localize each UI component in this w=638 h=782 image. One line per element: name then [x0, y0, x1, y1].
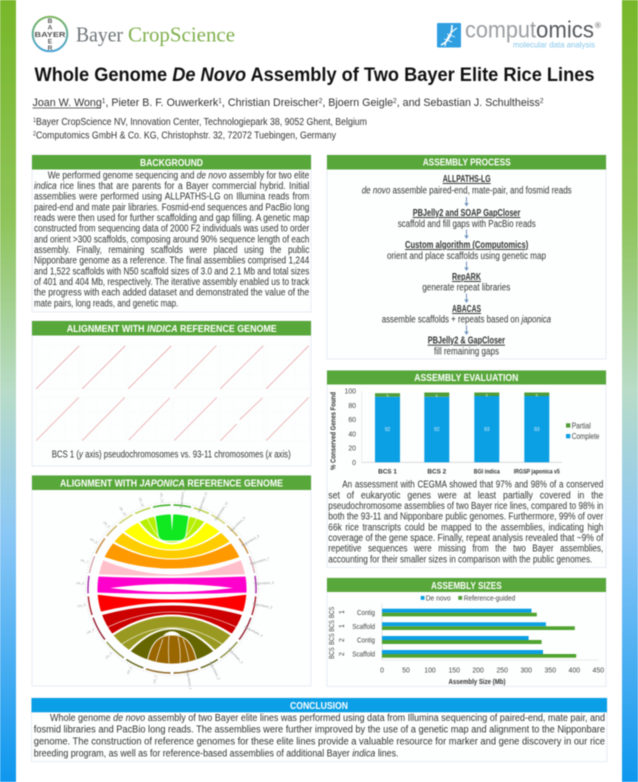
text: background body: mate pairs, long reads, and genetic map.	[34, 298, 178, 309]
text: evaluation body: 66k rice transcripts could be mapped to the assemblies, indicating high	[328, 522, 603, 533]
caption: dot plots: BCS 1 (y axis) pseudochromosomes vs. 93-11 chromosomes (x axis)	[52, 449, 291, 460]
text: evaluation body: accounting for their smaller sizes in comparison with the public genomes.	[328, 554, 592, 565]
x axis labels: 150	[448, 668, 460, 674]
chromosome labels: Nipponbare_12	[179, 486, 186, 509]
step: custom algorithm	[387, 240, 546, 262]
logo: Bayer CropScience: A	[48, 24, 53, 32]
heading: japonica alignment	[32, 476, 311, 490]
bar: BCS 2: BCS 2	[427, 468, 447, 476]
chromosome labels	[76, 486, 274, 690]
legend: De novo	[426, 596, 451, 602]
chromosome labels: chr_6	[76, 581, 84, 585]
logo: Computomics: comput	[465, 16, 536, 42]
x axis labels	[380, 668, 604, 674]
heading: assembly sizes: ASSEMBLY SIZES	[431, 581, 502, 592]
panel: background	[32, 155, 311, 312]
step: PBJelly2 and SOAP GapCloser: PBJelly2 and SOAP GapCloser	[413, 208, 521, 219]
text: evaluation body: coverage of the gene space. Finally, repeat analysis revealed that ~9% of	[328, 533, 604, 544]
affiliation 2: 2	[33, 132, 37, 138]
bars: BCS 1 scaffold: BCS	[329, 620, 336, 632]
text: background body: the progress with each added dataset and demonstrated the value of the	[34, 288, 309, 299]
chromosome labels: chr_2	[126, 666, 133, 675]
bars: BCS 2 contig: 2	[339, 638, 346, 642]
authors: 2	[393, 98, 397, 105]
heading: background	[32, 155, 311, 170]
x axis labels: 300	[520, 668, 532, 674]
authors: , Christian Dreischer	[222, 97, 319, 109]
authors: Joan W. Wong	[32, 97, 106, 109]
chart: conserved genes stacked bars	[328, 388, 600, 476]
bars: BCS 2 contig	[329, 633, 542, 645]
bar: BCS 2	[424, 392, 449, 476]
bars: BCS 2 scaffold: Scaffold	[352, 652, 375, 658]
chromosome labels: Nipponbare_5	[252, 602, 273, 610]
chart: conserved genes stacked bars: 0	[352, 460, 356, 467]
step: ALLPATHS-LG: de novo assemble paired-end, mate-pair, and fosmid reads	[362, 186, 572, 197]
chromosome labels: chr_4	[86, 628, 95, 635]
text: conclusion body: fosmid libraries and PacBio long reads. The assemblies were further improved by the use of a genetic map and alignment to the Nipponbare	[34, 725, 605, 736]
x axis labels: 350	[545, 668, 556, 674]
chromosome labels: chr_11	[138, 497, 145, 508]
x axis labels: 400	[569, 668, 580, 674]
chromosome labels: Nipponbare_8	[241, 534, 260, 548]
step: PBJelly2 and SOAP GapCloser: scaffold and fill gaps with PacBio reads	[398, 219, 536, 230]
chart: dot plots	[36, 345, 309, 441]
bars: BCS 2 contig: BCS	[329, 633, 336, 645]
panel: alignment with japonica	[32, 476, 311, 690]
title: Whole Genome De Novo Assembly of Two Bayer Elite Rice Lines	[34, 64, 594, 86]
arrow	[464, 262, 469, 271]
bars: BCS 1 scaffold	[329, 620, 575, 632]
chromosome labels: Nipponbare_11	[197, 491, 208, 513]
x axis labels: 50	[402, 668, 410, 674]
x axis labels: 0	[380, 668, 384, 674]
bar: BGI indica: 93	[484, 427, 490, 433]
panel: assembly evaluation	[327, 370, 606, 568]
bars: BCS 2 scaffold: BCS	[329, 647, 336, 659]
authors: , and Sebastian J. Schultheiss	[397, 97, 540, 109]
arrow	[464, 326, 469, 335]
bar: BCS 1: 92	[385, 427, 390, 433]
text: conclusion body: breeding program, as well as for reference-based assemblies of additional Bayer indica lines.	[34, 748, 399, 759]
logo: Bayer CropScience: E	[48, 38, 53, 46]
x axis title: Assembly Size (Mb)	[448, 677, 506, 686]
step: RepARK: RepARK	[452, 272, 481, 283]
panel: assembly sizes	[327, 578, 606, 686]
heading: assembly sizes	[327, 578, 606, 592]
authors	[32, 97, 544, 109]
chromosome labels: Nipponbare_1	[185, 669, 193, 690]
heading: conclusion	[32, 698, 607, 712]
chart: conserved genes stacked bars: 20	[348, 446, 356, 452]
text: background body: assembly. Finally, remaining scaffolds were placed using the public	[34, 245, 309, 256]
authors: , Bjoern Geigle	[322, 97, 393, 109]
legend	[421, 596, 515, 602]
affiliation 2: Computomics GmbH & Co. KG, Christophstr. 32, 72072 Tuebingen, Germany	[36, 130, 336, 142]
side bar: right	[622, 0, 638, 782]
text: background body	[34, 170, 310, 309]
logo: Bayer CropScience: Bayer	[76, 22, 123, 46]
chart: assembly size bars	[329, 604, 604, 686]
chromosome labels: chr_7	[80, 558, 89, 564]
affiliation 1: Bayer CropScience NV, Innovation Center, Technologiepark 38, 9052 Ghent, Belgium	[36, 117, 367, 128]
chart: conserved genes stacked bars: 80	[348, 403, 356, 410]
x axis labels: 250	[496, 668, 508, 674]
chromosome labels: chr_8	[89, 537, 98, 545]
panel: assembly process	[327, 155, 606, 359]
step: PBJelly2 & GapCloser: PBJelly2 & GapCloser	[428, 336, 505, 347]
authors: 1	[218, 98, 222, 105]
text: conclusion body	[34, 713, 605, 759]
step: PBJelly2 & GapCloser: fill remaining gaps	[434, 347, 499, 358]
chromosome labels: Nipponbare_2	[208, 661, 221, 681]
step: RepARK: generate repeat libraries	[422, 283, 510, 294]
bars: BCS 2 scaffold: 2	[339, 652, 346, 656]
bar: IRGSP japonica v5: 93	[534, 427, 540, 433]
step: ABACAS	[382, 304, 551, 326]
text: background body: paired-end and mate pair libraries. Fosmid-end sequences and PacBio long	[34, 202, 309, 213]
bar: BGI indica	[474, 392, 500, 476]
bar: BCS 1: BCS 1	[378, 468, 397, 476]
heading: assembly evaluation	[327, 370, 606, 384]
chromosome labels: Nipponbare_10	[214, 501, 229, 521]
x axis labels: 450	[593, 668, 604, 674]
bar: IRGSP japonica v5: 5	[536, 392, 539, 398]
chromosome labels: chr_12	[159, 492, 164, 503]
bars: BCS 1 contig	[329, 606, 537, 618]
heading: assembly process	[327, 155, 606, 170]
logo: Bayer CropScience: CropScience	[128, 22, 235, 46]
logo: Bayer CropScience: B	[48, 18, 53, 25]
chromosome labels: chr_3	[104, 651, 113, 660]
authors: , Pieter B. F. Ouwerkerk	[105, 97, 219, 109]
chromosome labels: chr_10	[118, 506, 127, 517]
step: ABACAS: assemble scaffolds + repeats based on japonica	[382, 315, 551, 326]
legend: Reference-guided	[464, 596, 515, 602]
ribbons	[97, 513, 247, 664]
bar: BCS 2: 92	[434, 427, 440, 433]
authors: 2	[319, 98, 322, 105]
text: conclusion body: Whole genome de novo assembly of two Bayer elite lines was performed using data from Illumina sequencing of paired-end, mate pair, and	[50, 713, 605, 724]
legend: Partial	[572, 421, 591, 430]
logo: Computomics: ®	[595, 21, 601, 30]
text: evaluation body	[328, 480, 604, 565]
bars: BCS 1 contig: 1	[339, 610, 346, 614]
step: PBJelly2 and SOAP GapCloser	[398, 208, 536, 230]
bars: BCS 2 scaffold	[329, 647, 576, 659]
text: background body: We performed genome sequencing and de novo assembly for two elite	[48, 170, 309, 181]
logo: Bayer CropScience: R	[48, 45, 53, 52]
bar: BGI indica: BGI indica	[474, 468, 500, 476]
text: background body: and orient >300 scaffolds, composing around 90% sequence length of each	[34, 234, 309, 245]
step: custom algorithm: orient and place scaffolds using genetic map	[387, 251, 546, 262]
arrow	[464, 197, 469, 206]
authors: 1	[102, 98, 106, 105]
chromosome labels: chr_1	[152, 675, 158, 684]
text: background body: reads were then used for further scaffolding and gap filling. A genetic map	[34, 213, 309, 224]
step: ALLPATHS-LG: ALLPATHS-LG	[443, 174, 491, 185]
heading: assembly process: ASSEMBLY PROCESS	[423, 158, 511, 168]
bar: BCS 1	[375, 393, 400, 476]
panel: conclusion	[32, 698, 607, 762]
chromosome labels: Nipponbare_9	[229, 516, 246, 533]
text: background body: indica rice lines that are parents for a Bayer commercial hybrid. Initial	[34, 181, 309, 192]
heading: japonica alignment: ALIGNMENT WITH JAPONICA REFERENCE GENOME	[60, 479, 283, 490]
chromosome labels: Nipponbare_4	[244, 625, 264, 638]
chromosome labels: Nipponbare_3	[227, 647, 244, 664]
arrow	[464, 294, 469, 303]
chromosome arcs	[88, 505, 256, 673]
logo: Computomics: molecular data analysis	[513, 40, 595, 50]
step: ALLPATHS-LG	[362, 174, 572, 197]
bar: BCS 1: 5	[386, 393, 389, 398]
heading: conclusion: CONCLUSION	[290, 701, 348, 712]
chromosome labels: chr_5	[77, 603, 86, 608]
text: background body: constructed from sequencing data of 2000 F2 individuals was used to order	[34, 224, 310, 235]
bars: BCS 1 contig: BCS	[329, 606, 336, 618]
chart: conserved genes stacked bars: % Conserved Genes Found	[328, 392, 338, 470]
text: conclusion body: genome. The construction of reference genomes for these elite lines provide a valuable resource for marker and gene discovery in our rice	[34, 737, 605, 748]
arrow	[464, 230, 469, 239]
bars: BCS 1 scaffold: 1	[339, 624, 346, 628]
chromosome labels: Nipponbare_6	[254, 581, 274, 586]
bar: IRGSP japonica v5: IRGSP japonica v5	[514, 468, 560, 476]
text: background body: and 1,522 scaffolds with N50 scaffold sizes of 3.0 and 2.1 Mb and total sizes	[34, 266, 309, 277]
x axis labels: 200	[472, 668, 484, 674]
chart: conserved genes stacked bars: 40	[348, 431, 356, 438]
text: background body: Nipponbare genome as a reference. The final assemblies comprised 1,244	[34, 256, 310, 267]
heading: background: BACKGROUND	[140, 158, 203, 169]
chromosome ticks	[85, 502, 259, 676]
chromosome labels: Nipponbare_7	[250, 556, 270, 566]
x axis labels: 100	[424, 668, 436, 674]
bar: BCS 2: 6	[436, 393, 439, 398]
text: background body: of 401 and 404 Mb, respectively. The iterative assembly enabled us to track	[34, 277, 309, 288]
legend: Complete	[572, 432, 600, 441]
bar: BGI indica: 5	[486, 392, 489, 398]
logo: Bayer CropScience	[33, 17, 235, 52]
chart: conserved genes stacked bars: 100	[344, 388, 356, 396]
chart: conserved genes stacked bars: 60	[348, 417, 356, 424]
step: custom algorithm: Custom algorithm (Computomics)	[405, 240, 528, 251]
side bar: left	[0, 0, 16, 782]
logo: Bayer CropScience: BAYER	[34, 30, 66, 39]
step: PBJelly2 & GapCloser	[428, 336, 505, 358]
heading: indica alignment: ALIGNMENT WITH INDICA REFERENCE GENOME	[67, 324, 277, 335]
text: background body: assemblies were performed using ALLPATHS-LG on Illumina reads from	[34, 192, 309, 203]
panel: alignment with indica	[32, 321, 311, 466]
heading: assembly evaluation: ASSEMBLY EVALUATION	[414, 373, 518, 384]
bars: BCS 2 contig: Contig	[357, 638, 375, 644]
affiliation 1: 1	[33, 118, 37, 124]
logo: Computomics: omics	[536, 16, 594, 42]
chromosome labels: chr_9	[102, 520, 111, 529]
legend	[566, 421, 600, 441]
logo: Computomics	[437, 16, 601, 50]
authors: 2	[540, 98, 544, 105]
bars: BCS 1 scaffold: Scaffold	[352, 624, 375, 631]
heading: indica alignment	[32, 321, 311, 336]
text: evaluation body: set of eukaryotic genes were at least partially covered in the	[328, 490, 603, 501]
step: ABACAS: ABACAS	[452, 304, 481, 315]
bars: BCS 1 contig: Contig	[357, 610, 375, 617]
chart: chord diagram	[76, 486, 274, 690]
bar: IRGSP japonica v5	[514, 392, 560, 476]
step: RepARK	[422, 272, 510, 294]
